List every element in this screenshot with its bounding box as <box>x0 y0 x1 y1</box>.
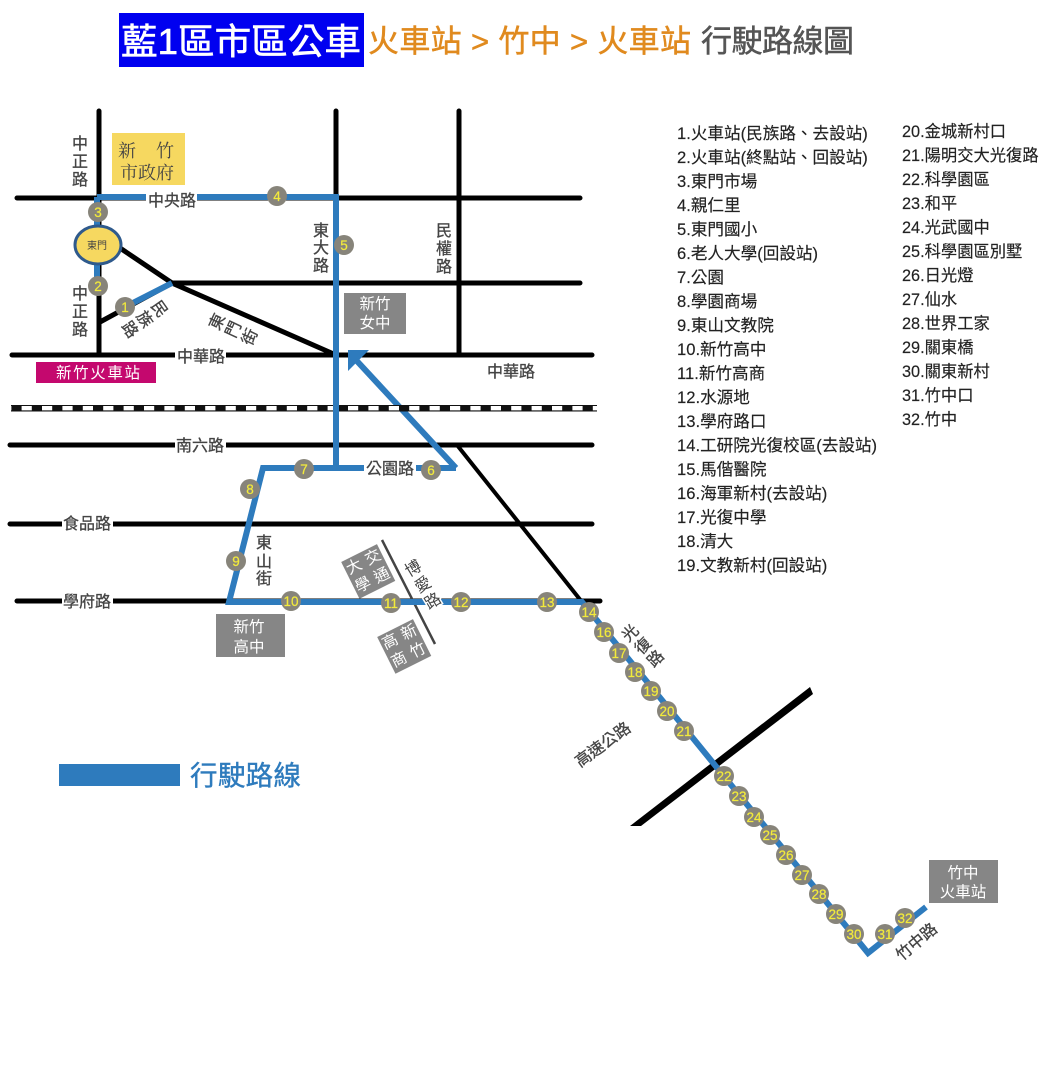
road label: Dongda Rd: 東大路 <box>313 222 329 275</box>
road label: Zhuzhong Rd: 竹中路 <box>893 920 941 964</box>
road label: Minquan Rd: 民權路 <box>436 223 452 276</box>
stop list column 1: 16.海軍新村(去設站) <box>677 484 827 503</box>
landmark: Zhuzhong station <box>929 860 998 903</box>
landmark: city government <box>112 133 185 185</box>
landmark: Hsinchu commercial school: 高商 <box>379 630 410 671</box>
stop 28 <box>809 884 829 904</box>
stop list column 2: 26.日光燈 <box>902 267 973 285</box>
stop 32 <box>895 908 915 928</box>
road label: Zhongyang Rd: 中央路 <box>148 192 196 210</box>
landmark: city government: 竹 <box>156 141 174 161</box>
stop 25 <box>760 825 780 845</box>
stop list column 2: 20.金城新村口 <box>902 123 1006 141</box>
stop list column 2: 32.竹中 <box>902 411 957 429</box>
stop list column 2: 21.陽明交大光復路 <box>902 147 1039 165</box>
stop 27 <box>792 865 812 885</box>
stop 32: 32 <box>897 911 913 926</box>
road label: Boai Rd: 博愛路 <box>402 557 444 613</box>
stop 16: 16 <box>596 625 612 640</box>
stop 23: 23 <box>731 789 747 804</box>
stop list column 2: 22.科學園區 <box>902 171 990 189</box>
legend: 行駛路線 <box>190 760 301 791</box>
landmark: train station <box>36 362 156 383</box>
landmark: NCTU: 交通 <box>362 546 393 587</box>
stop list column 1: 7.公園 <box>677 268 724 287</box>
stop 14: 14 <box>581 605 597 620</box>
stop list column 1: 2.火車站(終點站、回設站) <box>677 148 868 167</box>
landmark: east gate roundabout: 東門 <box>87 239 107 252</box>
stop 1: 1 <box>121 300 129 315</box>
road label: Dongshan St: 東山街 <box>256 534 272 588</box>
stop 11 <box>381 593 401 613</box>
road label: Guangfu Rd: 光復路 <box>618 621 668 671</box>
stop list column 2: 25.科學園區別墅 <box>902 243 1022 261</box>
stop 8 <box>240 479 260 499</box>
stop 24: 24 <box>746 810 762 825</box>
stop list column 2: 30.關東新村 <box>902 363 990 381</box>
stop list column 1 <box>677 124 877 575</box>
stop 10: 10 <box>283 594 299 609</box>
stop 14 <box>579 602 599 622</box>
arrow head <box>348 350 369 371</box>
stop 21 <box>674 721 694 741</box>
title: 藍1區市區公車 <box>121 21 361 62</box>
landmark: Hsinchu high school: 新竹 <box>233 618 265 636</box>
landmark: east gate roundabout <box>75 226 121 264</box>
road label: Zhonghua Rd west: 中華路 <box>177 348 225 366</box>
road label: Zhonghua Rd east: 中華路 <box>487 363 535 381</box>
stop 11: 11 <box>384 596 398 611</box>
stop 29 <box>826 904 846 924</box>
stop 23 <box>729 786 749 806</box>
road label: Xuefu Rd: 學府路 <box>63 593 111 611</box>
stop list column 2: 31.竹中口 <box>902 387 973 405</box>
stop list column 1: 19.文教新村(回設站) <box>677 556 827 575</box>
stop 13: 13 <box>539 595 555 610</box>
stop 19: 19 <box>643 684 659 699</box>
stop list column 1: 9.東山文教院 <box>677 316 774 335</box>
stop 4: 4 <box>273 189 281 204</box>
stop 25: 25 <box>762 828 778 843</box>
stop 13 <box>537 592 557 612</box>
bus route <box>97 197 926 953</box>
stop 9: 9 <box>232 554 240 569</box>
stop 26: 26 <box>778 848 794 863</box>
stop list column 2: 23.和平 <box>902 195 957 213</box>
stop markers <box>88 186 915 944</box>
road network <box>10 111 813 826</box>
stop 21: 21 <box>676 724 692 739</box>
stop list column 1: 3.東門市場 <box>677 172 757 191</box>
stop list column 1: 4.親仁里 <box>677 196 741 215</box>
road label: Gongyuan Rd: 公園路 <box>366 460 414 478</box>
stop 3: 3 <box>94 205 102 220</box>
stop 31 <box>875 924 895 944</box>
stop 7: 7 <box>300 462 308 477</box>
stop 7 <box>294 459 314 479</box>
railway line <box>1 405 597 412</box>
road label: Nanliu Rd: 南六路 <box>176 437 224 455</box>
stop 28: 28 <box>811 887 827 902</box>
stop 19 <box>641 681 661 701</box>
landmark: NCTU: 大學 <box>343 555 374 596</box>
stop 2 <box>88 276 108 296</box>
stop 6 <box>421 460 441 480</box>
stop 30: 30 <box>846 927 862 942</box>
legend <box>59 760 301 791</box>
stop list column 2: 24.光武國中 <box>902 219 990 237</box>
stop 22 <box>714 766 734 786</box>
stop 30 <box>844 924 864 944</box>
stop 3 <box>88 202 108 222</box>
stop list column 1: 10.新竹高中 <box>677 340 766 359</box>
stop 16 <box>594 622 614 642</box>
title: 火車站 > 竹中 > 火車站 <box>368 24 691 59</box>
stop 20: 20 <box>659 704 675 719</box>
stop list column 2: 27.仙水 <box>902 291 957 309</box>
stop list column 1: 17.光復中學 <box>677 508 766 527</box>
stop 22: 22 <box>716 769 732 784</box>
landmark: girls high school: 女中 <box>359 313 391 332</box>
stop 4 <box>267 186 287 206</box>
landmark: city government: 市政府 <box>120 163 174 183</box>
stop 6: 6 <box>427 463 435 478</box>
stop 24 <box>744 807 764 827</box>
stop 5 <box>334 235 354 255</box>
stop 12: 12 <box>453 595 469 610</box>
road label: Shipin Rd: 食品路 <box>63 515 111 533</box>
stop 8: 8 <box>246 482 254 497</box>
stop 17: 17 <box>611 646 627 661</box>
landmark: Hsinchu commercial school: 新竹 <box>398 621 429 662</box>
landmark: Zhuzhong station: 竹中 <box>947 864 979 882</box>
landmark: Hsinchu commercial school <box>377 619 431 674</box>
stop list column 1: 13.學府路口 <box>677 412 766 431</box>
road label: Minzu Rd: 民族路 <box>118 298 170 342</box>
landmark: Hsinchu high school: 高中 <box>233 638 265 656</box>
stop list column 1: 14.工研院光復校區(去設站) <box>677 436 877 455</box>
landmark: girls high school: 新竹 <box>359 295 391 313</box>
bus route: diagonal to arrow <box>348 350 456 468</box>
road label: Zhongzheng Rd north: 中正路 <box>72 135 88 189</box>
stop list column 2 <box>902 123 1039 429</box>
landmark: NCTU <box>341 544 395 599</box>
landmark: Hsinchu high school <box>216 614 285 657</box>
stop list column 2: 28.世界工家 <box>902 315 990 333</box>
stop 29: 29 <box>828 907 844 922</box>
title <box>119 13 854 67</box>
stop list column 1: 11.新竹高商 <box>677 364 765 383</box>
stop list column 1: 6.老人大學(回設站) <box>677 244 818 263</box>
landmark: Zhuzhong station: 火車站 <box>940 883 986 901</box>
stop list column 2: 29.關東橋 <box>902 339 973 357</box>
stop 5: 5 <box>340 238 348 253</box>
stop list column 1: 1.火車站(民族路、去設站) <box>677 124 868 143</box>
road label: Dongmen St: 東門街 <box>206 311 262 348</box>
stop list column 1: 15.馬偕醫院 <box>677 459 767 479</box>
stop 10 <box>281 591 301 611</box>
stop list column 1: 5.東門國小 <box>677 220 758 239</box>
stop 1 <box>115 297 135 317</box>
road label: Freeway: 高速公路 <box>572 719 634 771</box>
stop 17 <box>609 643 629 663</box>
title: 行駛路線圖 <box>701 24 854 59</box>
stop list column 1: 8.學園商場 <box>677 292 757 311</box>
stop 18 <box>625 662 645 682</box>
stop 26 <box>776 845 796 865</box>
stop 31: 31 <box>877 927 893 942</box>
stop 12 <box>451 592 471 612</box>
landmark: train station: 新竹火車站 <box>56 364 140 382</box>
stop 2: 2 <box>94 279 102 294</box>
stop 9 <box>226 551 246 571</box>
stop list column 1: 12.水源地 <box>677 388 750 407</box>
road label: Zhongzheng Rd south: 中正路 <box>72 285 88 339</box>
landmark: city government: 新 <box>118 141 136 161</box>
stop 27: 27 <box>794 868 810 883</box>
stop 18: 18 <box>627 665 643 680</box>
stop list column 1: 18.清大 <box>677 532 733 551</box>
landmark: girls high school <box>344 293 406 334</box>
stop 20 <box>657 701 677 721</box>
